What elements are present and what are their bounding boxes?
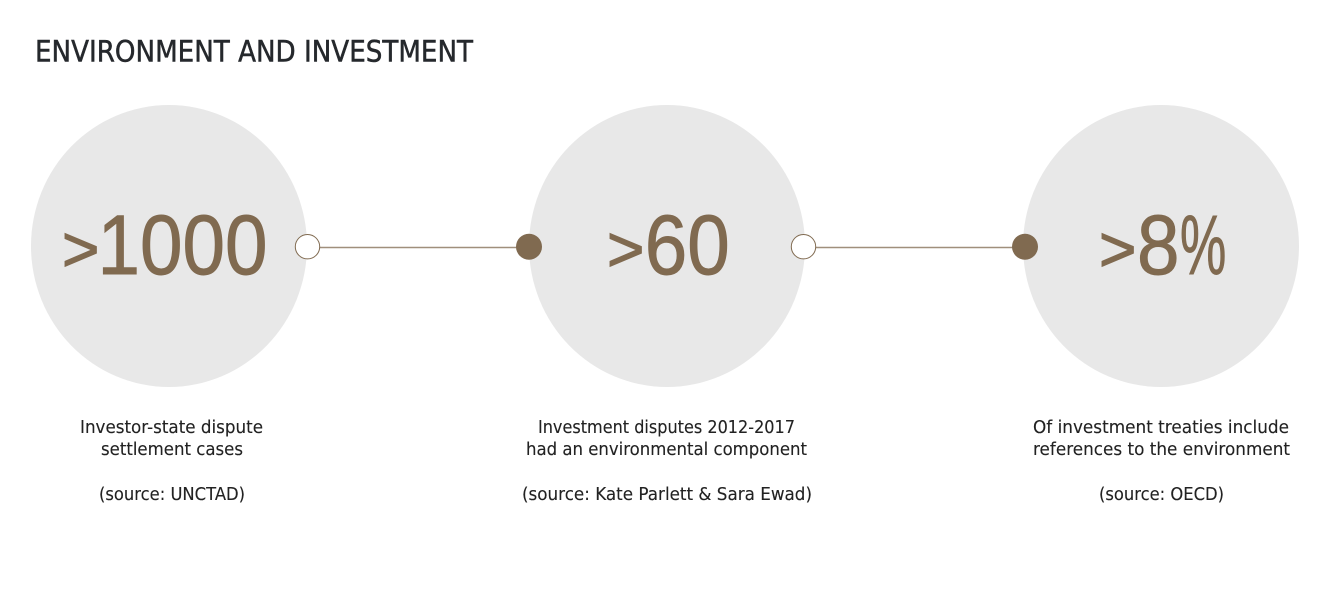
number: >8% xyxy=(1099,198,1226,293)
caption: treaties: Of investment treaties include xyxy=(1033,418,1289,438)
caption: disputes xyxy=(80,418,263,505)
caption: environmental disputes: had an environmental component xyxy=(526,440,807,460)
filled dot xyxy=(1012,234,1038,260)
caption: environmental disputes: Investment disputes 2012-2017 xyxy=(538,418,795,438)
number: >8%: % xyxy=(1180,198,1226,292)
circle: treaties xyxy=(1023,105,1299,387)
connector: second to third circle xyxy=(791,234,1038,260)
open dot xyxy=(295,234,320,259)
panel: treaties stat xyxy=(1023,105,1299,387)
number: >8%: > xyxy=(1099,213,1136,285)
caption: disputes: (source: UNCTAD) xyxy=(99,485,245,505)
number: >60: 60 xyxy=(645,199,730,293)
number: >8%: 8 xyxy=(1137,199,1180,293)
panel: disputes stat xyxy=(31,105,307,387)
caption: environmental disputes: (source: Kate Parlett & Sara Ewad) xyxy=(522,485,812,505)
caption: disputes: settlement cases xyxy=(101,440,243,460)
caption: treaties: (source: OECD) xyxy=(1099,485,1224,505)
number: >60 xyxy=(607,199,730,293)
number: >1000: > xyxy=(62,213,99,285)
caption: environmental disputes xyxy=(522,418,812,505)
number: >1000: 1000 xyxy=(98,199,268,293)
caption: treaties: references to the environment xyxy=(1033,440,1290,460)
circle: disputes xyxy=(31,105,307,387)
number: >60: > xyxy=(607,213,644,285)
panel: environmental disputes stat xyxy=(529,105,805,387)
circle: environmental disputes xyxy=(529,105,805,387)
caption: treaties xyxy=(1033,418,1290,505)
caption: disputes: Investor-state dispute xyxy=(80,418,263,438)
open dot xyxy=(791,234,816,259)
filled dot xyxy=(516,234,542,260)
connector: first to second circle xyxy=(295,234,542,260)
title: ENVIRONMENT AND INVESTMENT xyxy=(35,34,474,68)
